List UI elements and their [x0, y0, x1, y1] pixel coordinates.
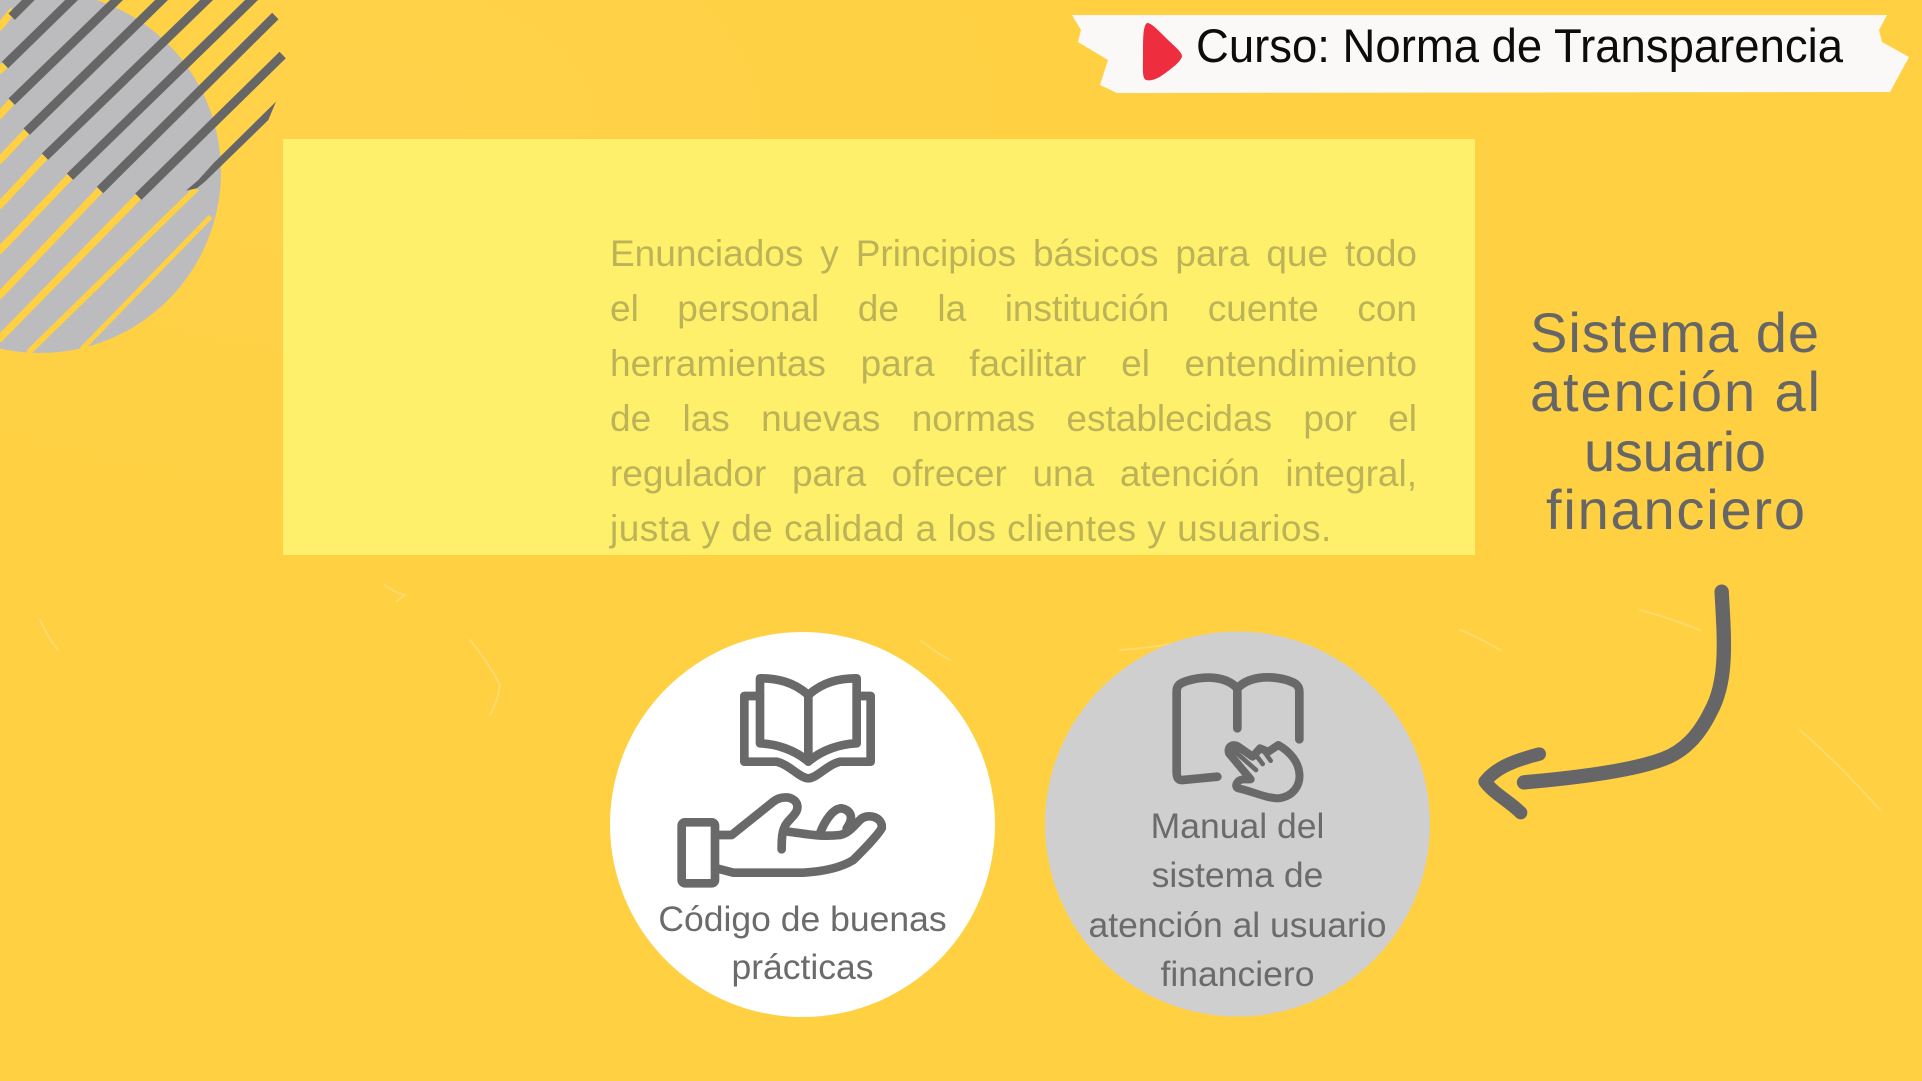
label: prácticas — [731, 947, 874, 987]
icon: red play — [1143, 23, 1182, 80]
course banner — [1072, 15, 1909, 93]
paragraph text: herramientas para facilitar el entendimiento — [610, 343, 1417, 384]
label — [1088, 806, 1387, 994]
heading: sistema de atención: Sistema de — [1530, 301, 1819, 364]
paragraph text: Enunciados y Principios básicos para que todo — [610, 233, 1417, 274]
label: Código de buenas — [658, 899, 947, 939]
icon: book with pointing hand — [1177, 677, 1299, 798]
label: financiero — [1161, 954, 1314, 994]
label: Manual del — [1151, 806, 1324, 846]
label — [658, 899, 947, 987]
paragraph text: el personal de la institución cuente con — [610, 288, 1417, 329]
banner title: Curso: Norma de Transparencia — [1196, 19, 1844, 72]
decorative striped circle — [0, 0, 283, 353]
banner tape — [1072, 15, 1909, 93]
panel: código de buenas prácticas — [610, 632, 995, 1017]
heading: sistema de atención — [1530, 301, 1820, 541]
heading: sistema de atención: financiero — [1546, 478, 1805, 541]
panel: manual del sistema — [1045, 632, 1430, 1016]
heading: sistema de atención: atención al — [1530, 360, 1820, 423]
paragraph text — [609, 233, 1417, 549]
heading: sistema de atención: usuario — [1584, 420, 1766, 483]
paragraph text: de las nuevas normas establecidas por el — [610, 398, 1417, 439]
arrow — [1485, 592, 1724, 813]
panel: yellow text box — [283, 139, 1475, 555]
label: atención al usuario — [1088, 905, 1387, 945]
paragraph text: regulador para ofrecer una atención integral, — [610, 453, 1417, 494]
icon: book over open hand — [682, 678, 882, 883]
paragraph text: justa y de calidad a los clientes y usuarios. — [610, 508, 1332, 549]
label: sistema de — [1152, 855, 1323, 895]
